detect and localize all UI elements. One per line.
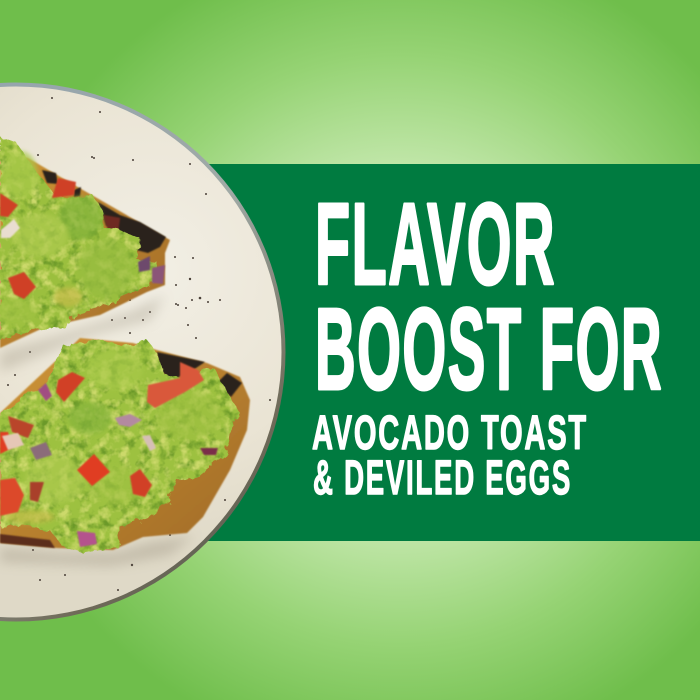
- avocado mash: [0, 340, 240, 553]
- tomato: [0, 178, 76, 299]
- avocado chunks: [0, 151, 134, 326]
- red onion: [2, 383, 218, 547]
- toast shadow: [0, 295, 165, 372]
- avocado mash: [0, 137, 157, 340]
- toast shadow: [0, 535, 195, 566]
- plate: [0, 82, 286, 622]
- dark green banner: [205, 164, 700, 541]
- headline text: [312, 179, 663, 505]
- burnt crust: [42, 170, 166, 253]
- upper avocado toast: [0, 137, 170, 372]
- red onion: [1, 219, 165, 284]
- crust: [0, 338, 250, 550]
- plate specks: [7, 97, 271, 591]
- lower avocado toast: [0, 338, 250, 566]
- tomato: [0, 362, 204, 516]
- avocado chunks: [5, 350, 224, 524]
- crust: [0, 150, 170, 348]
- burnt crust: [0, 352, 242, 548]
